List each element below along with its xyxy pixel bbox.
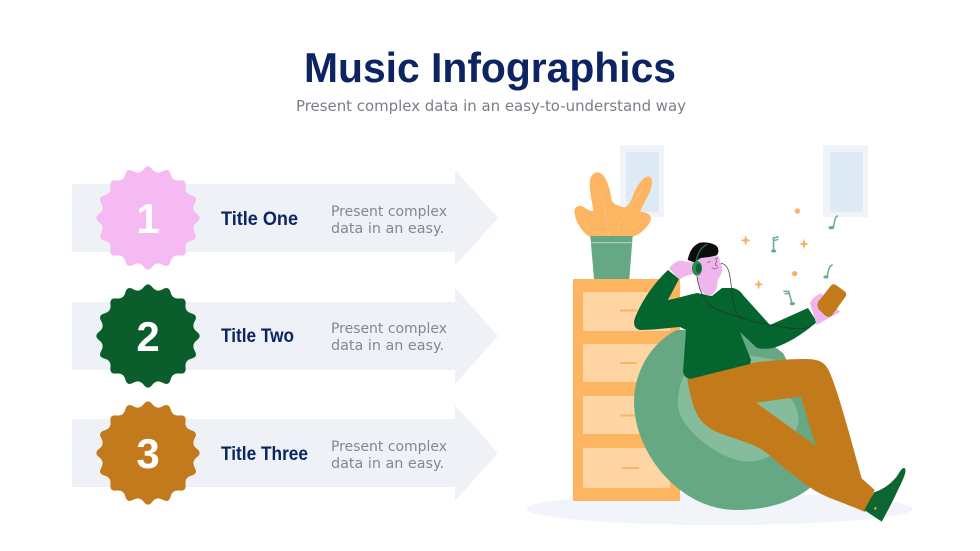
- description 1: Present complex: [331, 204, 447, 220]
- arrow 3: [72, 405, 498, 501]
- badge 3: [96, 401, 200, 505]
- description 2: Present complex: [331, 321, 447, 337]
- description 1: data in an easy.: [331, 221, 444, 237]
- trousers: [687, 359, 875, 512]
- row 1: title one: [72, 166, 498, 270]
- description 3: Present complex: [331, 439, 447, 455]
- potted plant: [576, 174, 651, 279]
- row 2: title two: [72, 284, 498, 388]
- arrow 2: [72, 288, 498, 384]
- sparkles, dots and music notes: [741, 208, 838, 305]
- shoe: [864, 468, 905, 522]
- heading: title two: Title Two: [221, 326, 294, 347]
- bean bag: [634, 330, 820, 510]
- earphone wires: [697, 263, 810, 329]
- arrow 1: [72, 170, 498, 266]
- number 2: 2: [136, 313, 160, 360]
- row 3: title three: [72, 401, 498, 505]
- heading: title three: Title Three: [221, 444, 308, 465]
- number 1: 1: [136, 195, 160, 242]
- heading: title one: Title One: [221, 209, 298, 230]
- right window: [823, 145, 868, 217]
- number 3: 3: [136, 430, 160, 477]
- subtitle: Present complex data in an easy-to-understand way: [296, 97, 686, 115]
- left window: [620, 145, 664, 217]
- illustration: man listening to music: [526, 145, 912, 525]
- floor shadow: [526, 493, 912, 525]
- description 3: data in an easy.: [331, 456, 444, 472]
- phone in hand: [810, 284, 846, 325]
- drawer cabinet: [573, 279, 680, 501]
- description 2: data in an easy.: [331, 338, 444, 354]
- head and hand: [669, 242, 722, 296]
- sweater: [634, 270, 817, 379]
- title: Music Infographics: [304, 44, 676, 91]
- badge 1: [96, 166, 200, 270]
- badge 2: [96, 284, 200, 388]
